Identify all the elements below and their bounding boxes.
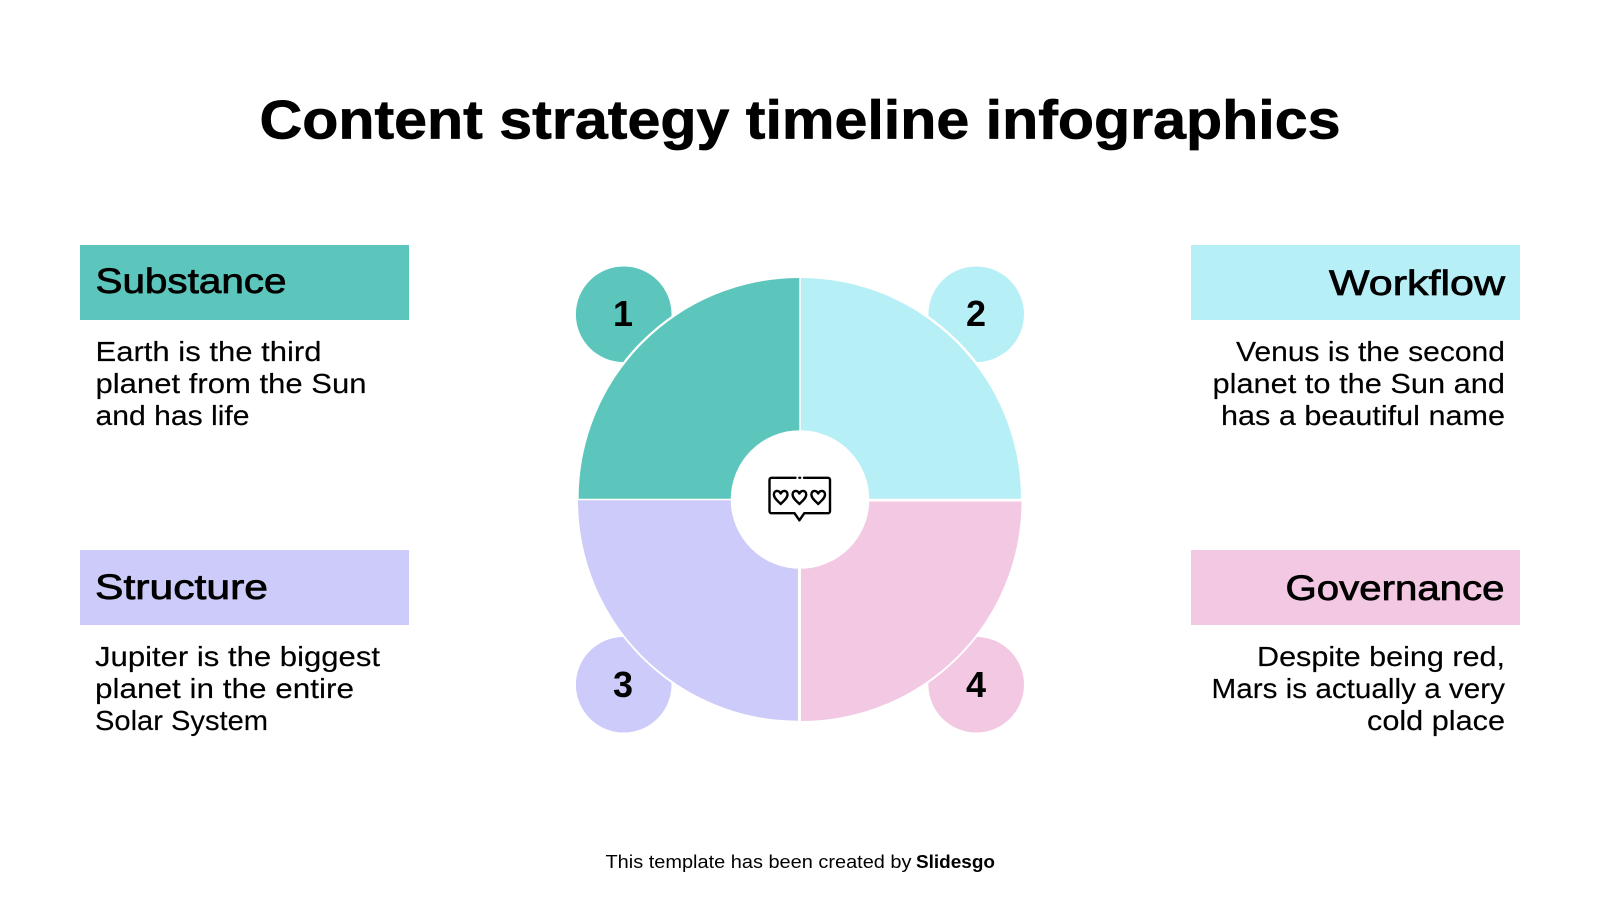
icon: speech bubble with three hearts [770,478,830,520]
text block: Governance: Mars is actually a very [1212,673,1505,704]
text block: Structure: Solar System [95,705,268,736]
number badge 2: 2 [966,293,986,334]
text block: Substance: planet from the Sun [96,368,366,399]
text block: Governance: cold place [1367,705,1505,736]
footer credit: This template has been created by [606,852,912,872]
text block: Workflow: planet to the Sun and [1212,368,1505,399]
text block: Substance [96,336,366,431]
number badge 4 [928,637,1024,732]
chart: four-quadrant circle [576,266,1024,732]
panel: Structure [80,550,409,736]
quadrant 4 [801,502,1022,721]
footer credit: Slidesgo [916,852,995,872]
text block: Substance: and has life [96,400,250,431]
number badge 3 [576,637,672,732]
number badge 2 [928,266,1024,362]
panel: Substance [80,245,409,431]
number badge 4: 4 [966,664,986,705]
title: Content strategy timeline infographics [260,88,1340,150]
text block: Governance: Despite being red, [1257,641,1505,672]
text block: Structure [95,641,380,736]
text block: Structure: planet in the entire [95,673,354,704]
quadrant 1 [579,278,799,499]
text block: Workflow [1212,336,1505,431]
center circle [731,430,869,569]
text block: Governance [1212,641,1505,736]
quadrant 2 [801,278,1021,499]
number badge 1: 1 [613,293,633,334]
heading bar: Workflow [1191,245,1520,320]
heading bar: Structure [80,550,409,625]
heading bar: Substance: Substance [96,262,286,301]
text block: Workflow: Venus is the second [1236,336,1505,367]
text block: Substance: Earth is the third [96,336,322,367]
heading bar: Workflow: Workflow [1329,264,1506,303]
heading bar: Substance [80,245,409,320]
text block: Structure: Jupiter is the biggest [95,641,380,672]
panel: Workflow [1191,245,1520,431]
heading bar: Governance: Governance [1286,569,1504,608]
number badge 1 [576,266,672,362]
number badge 3: 3 [613,664,633,705]
quadrant 3 [578,500,798,721]
heading bar: Governance [1191,550,1520,625]
heading bar: Structure: Structure [95,568,268,607]
text block: Workflow: has a beautiful name [1221,400,1505,431]
panel: Governance [1191,550,1520,736]
